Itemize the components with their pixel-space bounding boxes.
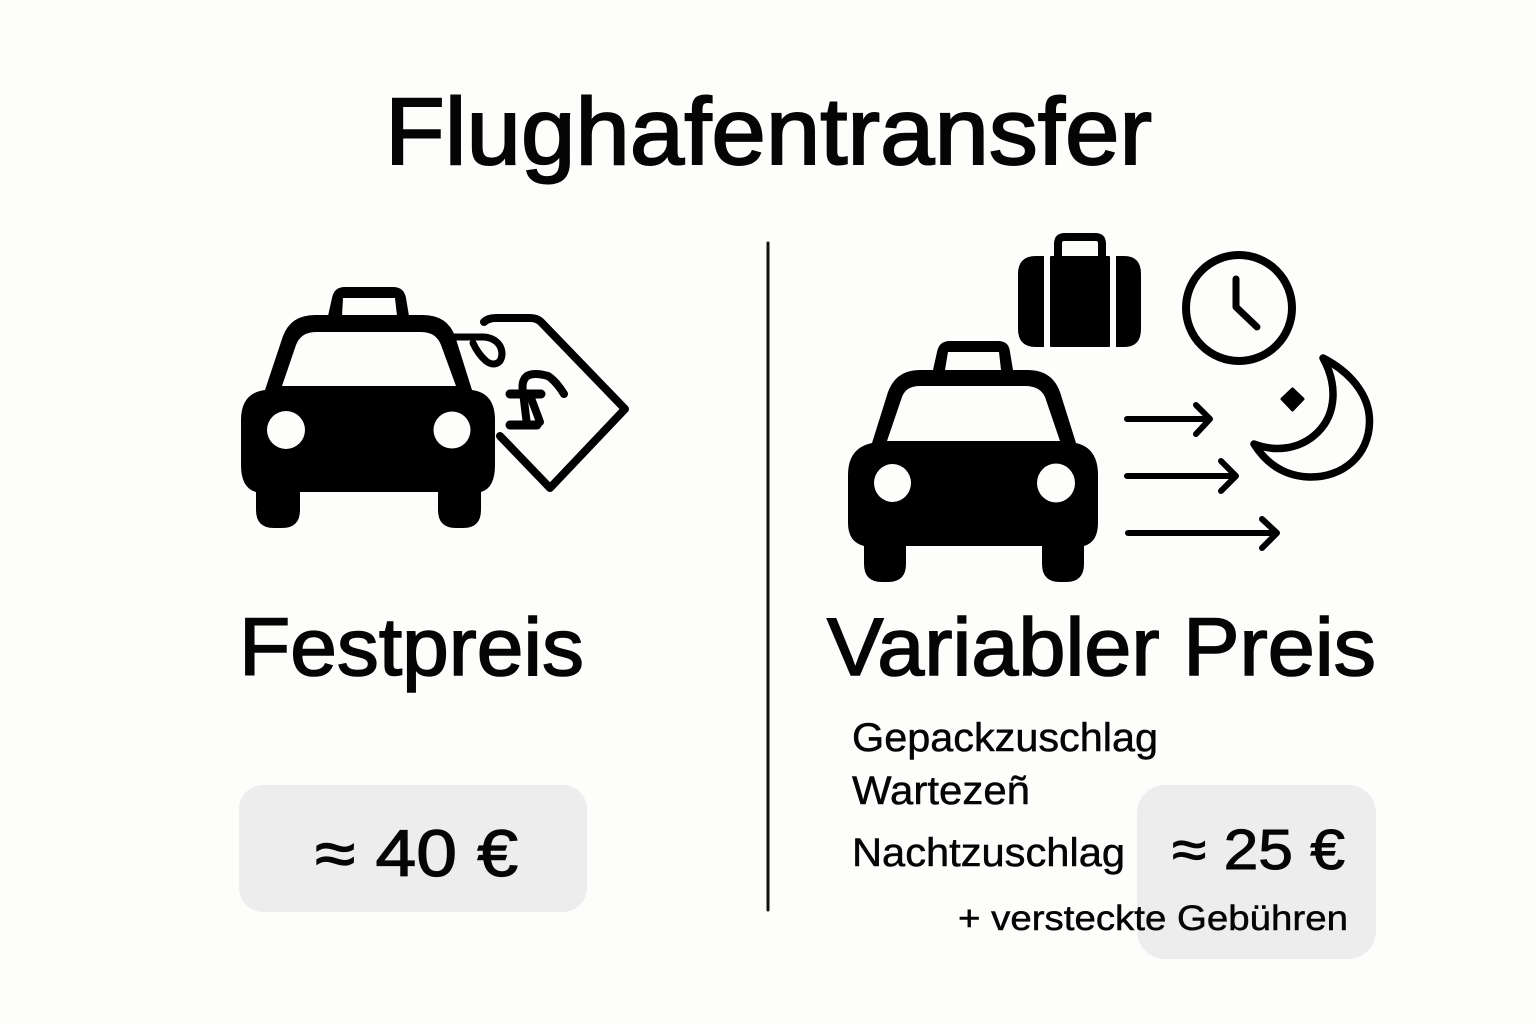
note: hidden fees: + versteckte Gebühren <box>958 899 1348 938</box>
price box: 40 euro: ≈ 40 € <box>315 816 518 890</box>
icon: taxi with price tag <box>241 287 625 528</box>
icon: suitcase <box>1018 233 1141 347</box>
list: surcharges: Wartezeñ <box>852 769 1030 813</box>
panel: fixed price <box>239 287 625 912</box>
price box: 40 euro <box>239 785 587 912</box>
icon: taxi <box>241 287 495 528</box>
list: surcharges: Gepackzuschlag <box>852 716 1158 760</box>
panel: variable price <box>827 233 1376 959</box>
title: Flughafentransfer <box>385 79 1152 185</box>
icon: price tag <box>453 318 625 488</box>
list: surcharges: Nachtzuschlag <box>852 831 1125 875</box>
heading: Festpreis: Festpreis <box>239 602 584 693</box>
price box: 25 euro: ≈ 25 € <box>1172 818 1345 882</box>
icon: moon <box>1254 358 1370 477</box>
list: surcharges <box>852 716 1158 875</box>
icon: clock <box>1186 255 1292 361</box>
centre divider <box>766 243 770 910</box>
heading: Variabler Preis: Variabler Preis <box>827 602 1376 693</box>
icon: arrows <box>1127 405 1277 548</box>
price box: 25 euro <box>1137 785 1376 959</box>
icon: taxi <box>848 341 1098 582</box>
